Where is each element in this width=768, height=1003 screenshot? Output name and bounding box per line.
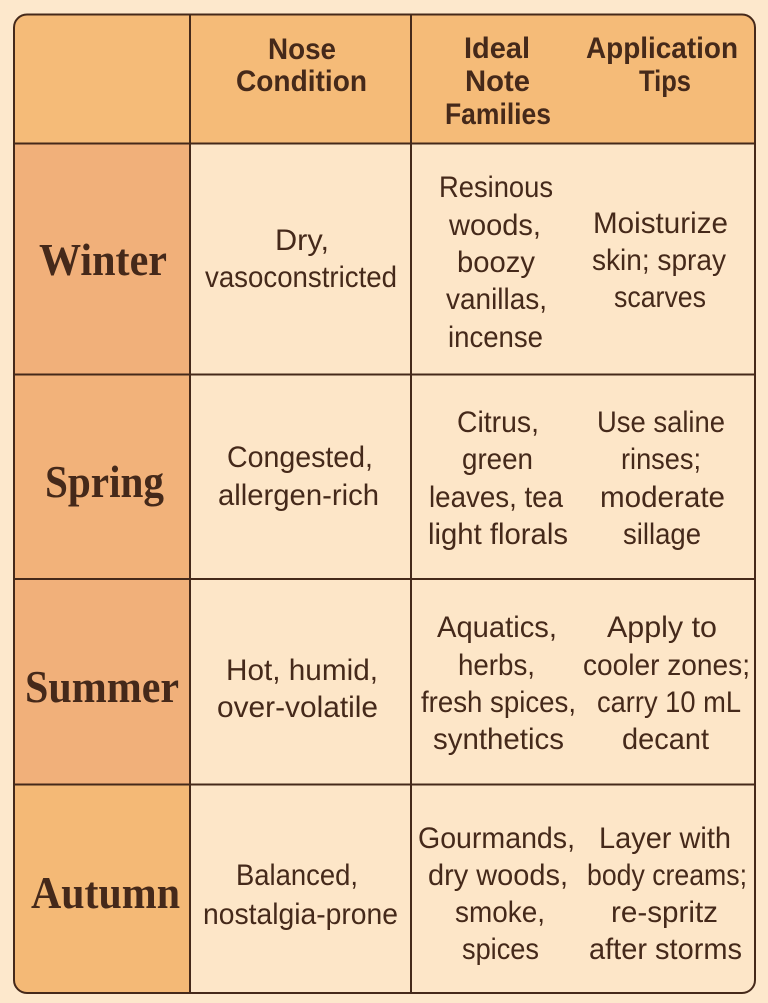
heading: Ideal Note Families: Ideal: [464, 32, 530, 65]
note families: Spring: Citrus,: [457, 406, 539, 439]
heading: Application Tips: [586, 32, 738, 98]
note families: Autumn: [418, 822, 575, 966]
heading: Nose Condition: Condition: [236, 65, 367, 98]
application tips: Spring: [597, 406, 725, 551]
application tips: Summer: Apply to: [607, 611, 717, 644]
heading: Application Tips: Application: [586, 32, 738, 65]
note families: Spring: [428, 406, 568, 551]
heading: Ideal Note Families: Note: [465, 65, 530, 98]
row: Summer: [25, 611, 750, 756]
application tips: Spring: Use saline: [597, 406, 725, 439]
nose condition: Winter: [205, 224, 397, 294]
note families: Winter: Resinous: [439, 171, 553, 204]
application tips: Summer: decant: [622, 723, 710, 756]
application tips: Spring: moderate: [600, 481, 725, 514]
nose condition: Summer: Hot, humid,: [226, 654, 378, 687]
heading: Nose Condition: Nose: [268, 33, 336, 66]
nose condition: Spring: allergen-rich: [218, 479, 379, 512]
note families: Spring: leaves, tea: [429, 481, 563, 514]
heading: Application Tips: Tips: [639, 65, 691, 98]
season label: Summer: Summer: [25, 662, 179, 712]
note families: Winter: vanillas,: [446, 283, 547, 316]
nose condition: Autumn: nostalgia-prone: [203, 898, 398, 931]
header row: [236, 32, 738, 131]
season label: Spring: Spring: [45, 457, 164, 507]
heading: Ideal Note Families: Families: [445, 98, 551, 131]
note families: Spring: green: [462, 443, 533, 476]
application tips: Autumn: body creams;: [587, 859, 747, 892]
note families: Summer: [421, 611, 576, 756]
application tips: Summer: cooler zones;: [583, 649, 750, 682]
row: Winter: [39, 171, 728, 354]
note families: Winter: [439, 171, 553, 354]
note families: Winter: woods,: [448, 209, 541, 242]
application tips: Winter: skin; spray: [592, 244, 726, 277]
application tips: Spring: sillage: [623, 518, 701, 551]
nose condition: Spring: Congested,: [227, 441, 373, 474]
application tips: Summer: [583, 611, 750, 756]
nose condition: Autumn: Balanced,: [236, 859, 358, 892]
note families: Winter: boozy: [457, 246, 535, 279]
note families: Autumn: smoke,: [455, 896, 545, 929]
note families: Autumn: dry woods,: [428, 859, 568, 892]
row: Autumn: [31, 822, 747, 966]
season label: Autumn: Autumn: [31, 868, 180, 918]
nose condition: Summer: over-volatile: [217, 691, 378, 724]
nose condition: Winter: vasoconstricted: [205, 261, 397, 294]
note families: Autumn: spices: [462, 933, 539, 966]
note families: Autumn: Gourmands,: [418, 822, 575, 855]
application tips: Winter: scarves: [614, 281, 706, 314]
nose condition: Winter: Dry,: [275, 224, 329, 257]
nose condition: Autumn: [203, 859, 398, 931]
note families: Summer: fresh spices,: [421, 686, 576, 719]
note families: Summer: herbs,: [458, 649, 535, 682]
note families: Summer: Aquatics,: [437, 611, 557, 644]
row: Spring: [45, 406, 725, 551]
application tips: Autumn: [587, 822, 747, 966]
heading: Ideal Note Families: [445, 32, 551, 131]
nose condition: Summer: [217, 654, 378, 724]
note families: Summer: synthetics: [433, 723, 564, 756]
note families: Winter: incense: [448, 321, 543, 354]
application tips: Summer: carry 10 mL: [597, 686, 741, 719]
heading: Nose Condition: [236, 33, 367, 98]
application tips: Winter: Moisturize: [593, 207, 728, 240]
application tips: Spring: rinses;: [621, 443, 701, 476]
note families: Spring: light florals: [428, 518, 568, 551]
season label: Winter: Winter: [39, 235, 167, 285]
application tips: Autumn: Layer with: [599, 822, 731, 855]
application tips: Autumn: re-spritz: [611, 896, 718, 929]
application tips: Autumn: after storms: [589, 933, 742, 966]
nose condition: Spring: [218, 441, 379, 512]
application tips: Winter: [592, 207, 728, 314]
